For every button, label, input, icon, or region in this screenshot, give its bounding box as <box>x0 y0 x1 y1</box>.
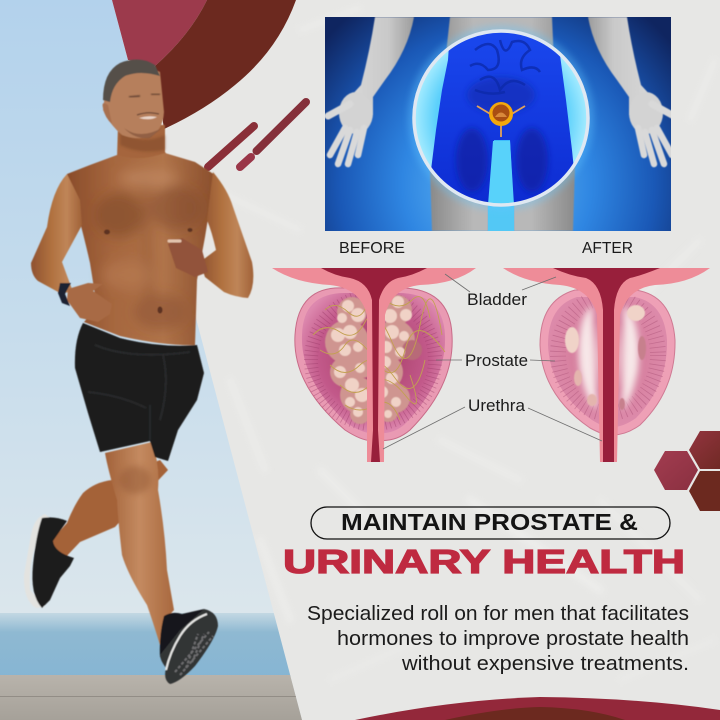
nipples and navel <box>104 228 192 314</box>
figure: torso and legs <box>430 17 575 231</box>
hair <box>103 59 160 102</box>
highlighted prostate <box>477 102 525 137</box>
torso <box>67 153 215 345</box>
medical pelvis image <box>325 17 674 231</box>
label: Urethra: Urethra <box>468 396 526 415</box>
remaining tissue spots <box>565 305 646 410</box>
bladder wall <box>272 268 476 462</box>
lens circle <box>408 25 594 215</box>
bottom wave decoration <box>355 697 720 720</box>
runner figure <box>24 59 253 684</box>
tissue growth lumps <box>325 295 422 424</box>
back shoe <box>24 514 74 608</box>
front shoe <box>160 609 218 684</box>
front leg <box>105 442 174 645</box>
wristwatch <box>58 283 71 306</box>
heading pill: MAINTAIN PROSTATE & <box>341 509 638 535</box>
shorts folds <box>88 345 190 440</box>
label: BEFORE: BEFORE <box>339 240 405 257</box>
description text: Specialized roll on for men that facilitates <box>307 603 689 625</box>
label: Prostate: Prostate <box>465 351 528 370</box>
bladder and urethra channel <box>321 268 427 462</box>
intestines <box>470 40 540 94</box>
figure: left arm and hand <box>328 17 414 164</box>
shorts <box>75 323 204 461</box>
label: AFTER: AFTER <box>582 240 633 257</box>
description text: without expensive treatments. <box>401 653 689 675</box>
radial fibres <box>311 296 435 424</box>
face shading <box>124 128 162 138</box>
leader lines <box>383 274 602 449</box>
left arm with hand <box>31 174 112 322</box>
right arm with fist <box>168 172 253 298</box>
description text <box>307 603 689 675</box>
back leg <box>51 460 168 560</box>
pale inner lobes <box>579 305 639 410</box>
head <box>103 59 164 138</box>
neck shadow <box>120 130 165 152</box>
decorative hexagons <box>654 431 720 511</box>
radial fibres <box>558 297 658 413</box>
neck <box>105 125 180 170</box>
decorative red corner shape <box>112 0 296 129</box>
description text: hormones to improve prostate health <box>337 628 689 650</box>
pelvis shading <box>456 77 548 192</box>
blood vessels <box>313 297 445 420</box>
figure: right arm and hand <box>588 17 674 164</box>
bladder and urethra channel <box>553 268 660 462</box>
knee shading <box>119 466 151 494</box>
diagram: healthy prostate (after) <box>503 268 710 462</box>
chest shading <box>96 170 202 330</box>
label: Bladder: Bladder <box>467 290 527 309</box>
bladder wall <box>503 268 710 462</box>
decorative diagonal bars <box>208 102 306 167</box>
heading pill <box>311 507 670 539</box>
heading: urinary health: URINARY HEALTH <box>283 543 685 580</box>
beach photo background <box>0 0 310 720</box>
diagram: enlarged prostate (before) <box>272 268 476 462</box>
